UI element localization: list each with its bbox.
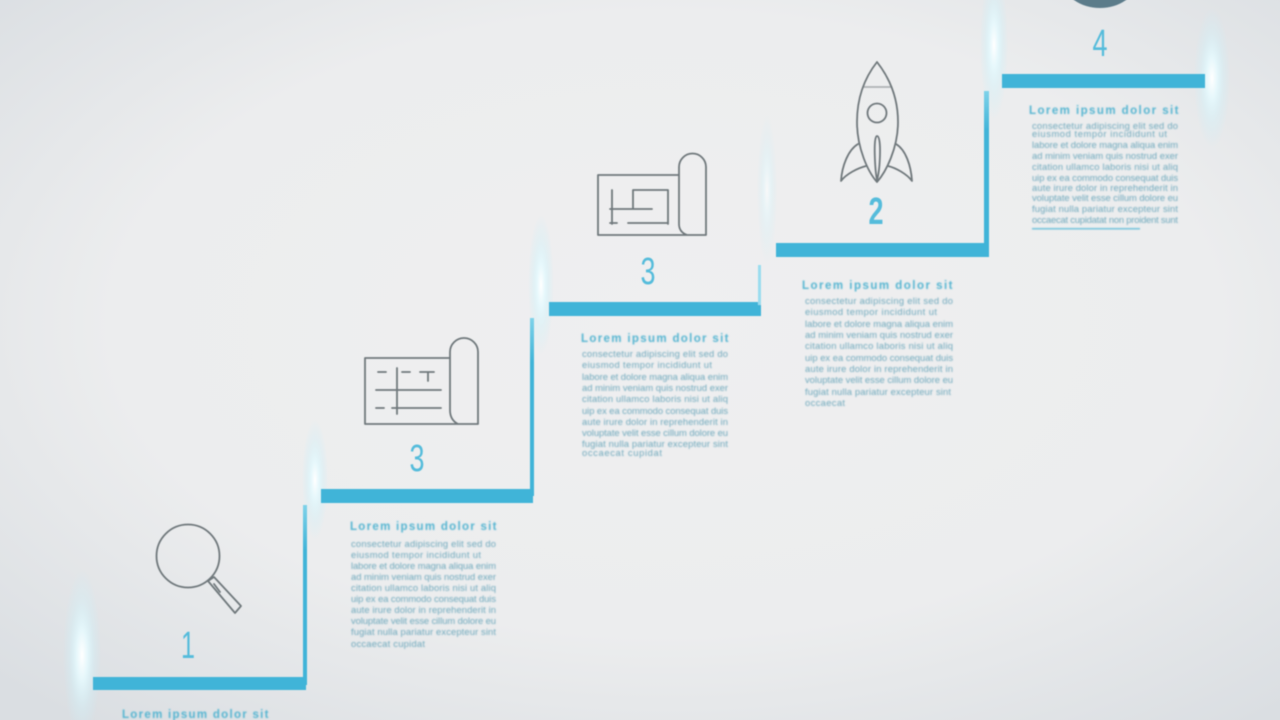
step 5 text: voluptate velit esse cillum dolore eu [1032, 192, 1178, 203]
step 4 text: ad minim veniam quis nostrud exer [805, 329, 953, 340]
step 3 text: ad minim veniam quis nostrud exer [582, 382, 728, 393]
step 4 [776, 62, 989, 408]
step 5 bar [1002, 74, 1205, 88]
step 2 text [350, 521, 497, 649]
step 4 riser [984, 91, 989, 249]
step 2 text: Lorem ipsum dolor sit [350, 521, 497, 533]
step 3 text: eiusmod tempor incididunt ut [582, 359, 712, 370]
step 2 bar [321, 489, 533, 503]
step 4 text: uip ex ea commodo consequat duis [805, 352, 953, 363]
step 5 text: labore et dolore magna aliqua enim [1032, 139, 1178, 150]
step 3 text: aute irure dolor in reprehenderit in [582, 416, 728, 427]
step 1 bar [93, 677, 306, 690]
step 2 riser [530, 318, 534, 496]
step 5 text: consectetur adipiscing elit sed do [1032, 120, 1178, 131]
step 3 riser [758, 265, 761, 305]
step 5 text: citation ullamco laboris nisi ut aliq [1032, 161, 1178, 172]
step 3 text: consectetur adipiscing elit sed do [582, 348, 728, 359]
step 2 text: ad minim veniam quis nostrud exer [351, 571, 496, 582]
step 5 text: eiusmod tempor incididunt ut [1032, 128, 1167, 139]
step 3 text: Lorem ipsum dolor sit [581, 333, 729, 345]
step 4 text: voluptate velit esse cillum dolore eu [805, 374, 953, 385]
step 5 text: Lorem ipsum dolor sit [1029, 105, 1179, 117]
step 3 text: voluptate velit esse cillum dolore eu [582, 427, 728, 438]
step 4 text: Lorem ipsum dolor sit [802, 280, 953, 292]
step 4 text: occaecat [805, 397, 845, 408]
step 3 text: occaecat cupidat [582, 447, 662, 458]
step 2 text: consectetur adipiscing elit sed do [351, 538, 496, 549]
step 3 text: fugiat nulla pariatur excepteur sint [582, 438, 728, 449]
step 4 text: fugiat nulla pariatur excepteur sint [805, 386, 951, 397]
step 4 text: aute irure dolor in reprehenderit in [805, 363, 953, 374]
step 5 text: ad minim veniam quis nostrud exer [1032, 150, 1178, 161]
step 3 bar [549, 302, 761, 316]
icon: dark circle cut off at top [1064, 0, 1136, 8]
step 4 text [802, 280, 953, 408]
icon: rocket [841, 62, 912, 182]
icon: magnifying glass [156, 524, 241, 613]
step 4 text: citation ullamco laboris nisi ut aliq [805, 340, 953, 351]
step 5 text: occaecat cupidatat non proident sunt [1032, 214, 1178, 225]
step 4 number: 2 [868, 191, 884, 233]
step 2 number: 3 [410, 438, 424, 480]
step 2 text: eiusmod tempor incididunt ut [351, 549, 481, 560]
step 3 text: uip ex ea commodo consequat duis [582, 405, 728, 416]
step 5 text: aute irure dolor in reprehenderit in [1032, 182, 1178, 193]
step 2 [321, 318, 534, 649]
step 1 number: 1 [181, 625, 195, 667]
step 2 text: occaecat cupidat [351, 638, 425, 649]
step 2 text: aute irure dolor in reprehenderit in [351, 604, 496, 615]
step 5 text: uip ex ea commodo consequat duis [1032, 172, 1178, 183]
step 5 text [1029, 105, 1179, 230]
step 3 text [581, 333, 729, 458]
step 4 text: eiusmod tempor incididunt ut [805, 306, 937, 317]
step 4 text: consectetur adipiscing elit sed do [805, 295, 953, 306]
step 2 text: uip ex ea commodo consequat duis [351, 593, 496, 604]
step 2 text: fugiat nulla pariatur excepteur sint [351, 626, 496, 637]
step 2 text: voluptate velit esse cillum dolore eu [351, 615, 496, 626]
step 5 number: 4 [1092, 23, 1108, 65]
step 2 text: labore et dolore magna aliqua enim [351, 560, 496, 571]
icon: blueprint scroll [365, 338, 478, 424]
step 3 text: citation ullamco laboris nisi ut aliq [582, 393, 728, 404]
step 2 text: citation ullamco laboris nisi ut aliq [351, 582, 496, 593]
step 4 text: labore et dolore magna aliqua enim [805, 318, 953, 329]
step 3 [549, 154, 761, 458]
icon: floor plan scroll [598, 154, 706, 235]
step 5 [1002, 0, 1205, 230]
step 1 riser [303, 505, 307, 685]
step 5 text: fugiat nulla pariatur excepteur sint [1032, 203, 1178, 214]
step 4 bar [776, 243, 989, 257]
step 1 [93, 505, 307, 720]
step 3 text: labore et dolore magna aliqua enim [582, 371, 728, 382]
step 3 number: 3 [640, 251, 656, 293]
